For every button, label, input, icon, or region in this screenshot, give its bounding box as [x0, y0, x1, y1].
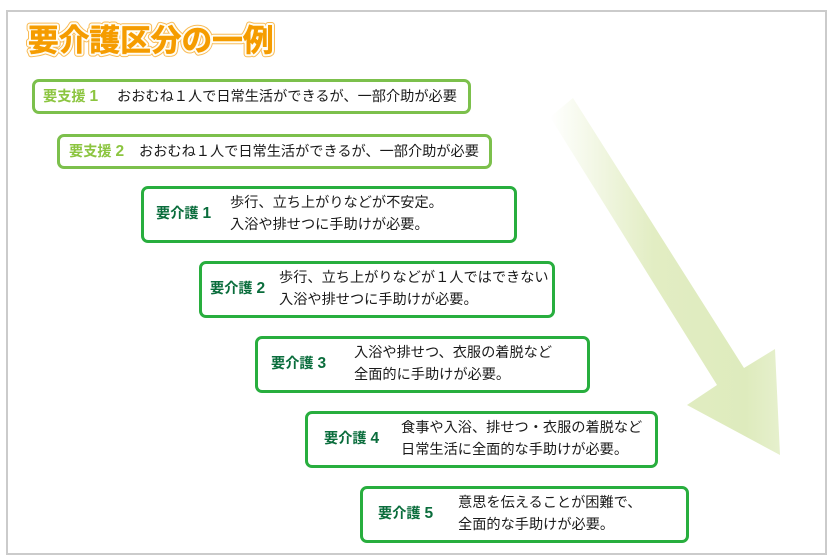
description: 要介護3: 入浴や排せつ、衣服の着脱など	[354, 345, 552, 361]
label: 要支援2: 要支援 2	[69, 143, 124, 160]
description: 要介護3	[354, 344, 552, 383]
panel: 要支援2	[57, 134, 492, 169]
description: 要介護5: 全面的な手助けが必要。	[458, 517, 614, 533]
panel: 要介護1	[141, 186, 517, 243]
title: 要介護区分の一例	[28, 23, 274, 58]
panel: 要介護2	[199, 261, 555, 318]
label: 要介護2: 要介護 2	[210, 280, 265, 297]
description: 要介護4: 日常生活に全面的な手助けが必要。	[401, 442, 628, 458]
description: 要介護2	[279, 270, 549, 308]
description: 要介護4	[401, 420, 642, 458]
panel: 要介護5	[360, 486, 689, 543]
panel: 要介護4	[305, 411, 658, 468]
label: 要介護5: 要介護 5	[378, 505, 433, 522]
description: 要介護2: 歩行、立ち上がりなどが１人ではできない	[279, 270, 549, 286]
description: 要介護5: 意思を伝えることが困難で、	[458, 495, 641, 511]
description: 要介護1: 入浴や排せつに手助けが必要。	[230, 217, 429, 233]
description: 要支援1: おおむね１人で日常生活ができるが、一部介助が必要	[117, 89, 457, 105]
label: 要介護1: 要介護 1	[156, 205, 211, 222]
panel: 要支援1	[32, 79, 471, 114]
label: 要支援1: 要支援 1	[43, 88, 98, 105]
description: 要介護1	[230, 194, 443, 233]
label: 要介護4: 要介護 4	[324, 430, 379, 447]
panel: 要介護3	[255, 336, 590, 393]
description: 要介護2: 入浴や排せつに手助けが必要。	[279, 292, 478, 308]
description: 要介護4: 食事や入浴、排せつ・衣服の着脱など	[401, 420, 642, 436]
description: 要介護3: 全面的に手助けが必要。	[354, 367, 510, 383]
title: 要介護区分の一例	[28, 23, 274, 58]
description: 要介護1: 歩行、立ち上がりなどが不安定。	[230, 195, 443, 211]
description: 要支援2: おおむね１人で日常生活ができるが、一部介助が必要	[139, 144, 479, 160]
label: 要介護3: 要介護 3	[271, 355, 326, 372]
title: 要介護区分の一例	[28, 23, 274, 58]
description: 要介護5	[458, 494, 641, 533]
